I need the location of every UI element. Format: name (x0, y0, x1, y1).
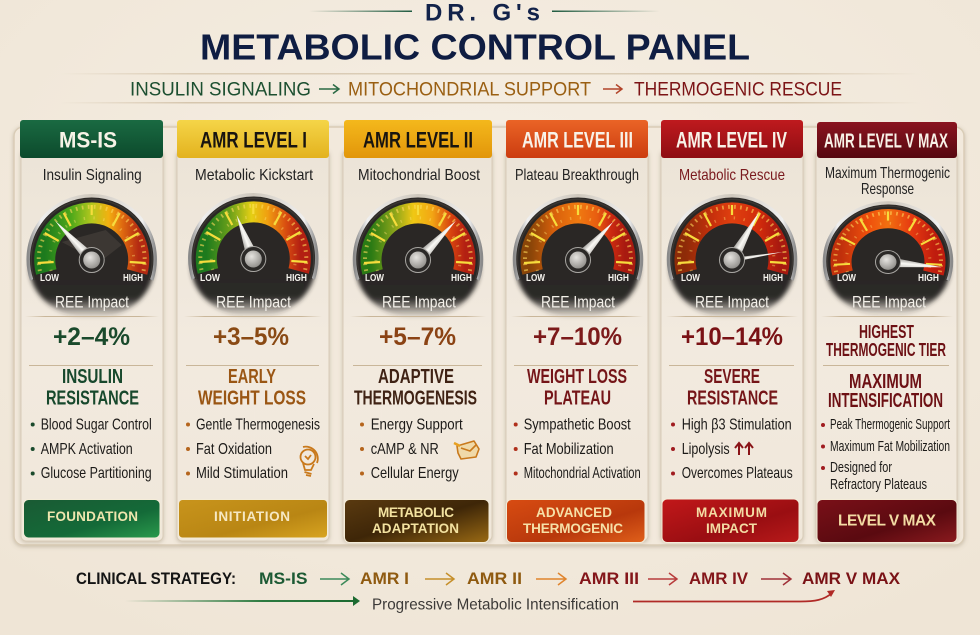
panel: MS-IS (20, 120, 163, 541)
badge: level v max (817, 500, 957, 542)
tier label (826, 322, 946, 360)
badge: metabolic adaptation (344, 500, 489, 542)
panel: AMR Level IV (661, 120, 803, 542)
value: +10–14% (681, 323, 783, 351)
badge: maximum impact (662, 499, 799, 542)
clinical strategy row: AMR II (467, 569, 522, 588)
divider (29, 365, 153, 366)
caption: Progressive Metabolic Intensification (372, 596, 619, 614)
divider (353, 365, 482, 366)
subtitle strip: INSULIN SIGNALING (130, 78, 311, 100)
gauge: REE Impact (541, 292, 615, 312)
bullet list: Designed for (830, 460, 892, 476)
header: AMR Level II: AMR LEVEL II (363, 128, 473, 152)
badge: metabolic adaptation: METABOLIC (378, 505, 454, 520)
heading: THERMOGENESIS (354, 388, 477, 410)
header: MS-IS: MS-IS (59, 128, 117, 152)
gauge: HIGH (451, 272, 472, 284)
bullet list: Mild Stimulation (196, 465, 288, 482)
clinical strategy row (76, 569, 901, 588)
subtitle strip: MITOCHONDRIAL SUPPORT (348, 78, 591, 100)
badge: metabolic adaptation: ADAPTATION (372, 521, 459, 536)
gauge (668, 196, 796, 318)
bullet list: Overcomes Plateaus (682, 465, 793, 482)
header: AMR Level III: AMR LEVEL III (522, 128, 633, 152)
divider (666, 316, 798, 317)
heading (354, 366, 477, 410)
badge: foundation (24, 500, 160, 538)
clinical strategy row: AMR III (579, 569, 639, 588)
panel: AMR Level III (506, 120, 648, 542)
gauge (824, 203, 952, 315)
gauge: REE Impact (55, 292, 129, 312)
header: AMR Level IV: AMR LEVEL IV (676, 128, 787, 152)
heading: PLATEAU (544, 388, 611, 410)
main panel frame (14, 127, 964, 545)
divider (184, 316, 322, 317)
gauge: LOW (40, 272, 59, 284)
clinical strategy row: AMR IV (689, 569, 749, 588)
bullet list: Glucose Partitioning (41, 465, 152, 482)
badge: maximum impact: IMPACT (706, 521, 758, 536)
bullet list: Refractory Plateaus (830, 477, 927, 493)
divider (186, 365, 319, 366)
badge: advanced thermogenic: THERMOGENIC (523, 521, 623, 536)
bullet list: Lipolysis (682, 441, 730, 458)
divider (823, 365, 949, 366)
header: AMR Level V Max (817, 122, 957, 158)
title block (200, 0, 750, 68)
bullet list: Gentle Thermogenesis (196, 416, 320, 434)
heading: EARLY (228, 366, 276, 388)
bullet list: Cellular Energy (371, 465, 459, 482)
bullet list (360, 416, 463, 482)
subtitle: Response (861, 181, 914, 198)
bullet list (671, 416, 793, 482)
gauge (28, 196, 155, 318)
gauge (514, 196, 642, 318)
panel: AMR Level V Max (816, 122, 957, 542)
subtitle strip: THERMOGENIC RESCUE (634, 78, 842, 100)
gauge: LOW (200, 272, 220, 284)
arrow (425, 573, 454, 585)
heading: INSULIN (62, 366, 123, 388)
bullet list (186, 416, 320, 482)
clinical strategy row: AMR V MAX (802, 569, 901, 588)
bullet list: Blood Sugar Control (41, 416, 152, 434)
clinical strategy row: AMR I (360, 569, 409, 588)
heading: WEIGHT LOSS (527, 366, 627, 388)
arrow (320, 573, 349, 585)
gauge: REE Impact (216, 292, 291, 312)
heading: WEIGHT LOSS (198, 388, 306, 410)
value: +7–10% (533, 323, 622, 351)
bullet list (821, 417, 950, 493)
gauge: REE Impact (852, 292, 926, 312)
arrow (648, 573, 677, 585)
gauge: HIGH (608, 272, 629, 284)
divider (350, 316, 486, 317)
title block: DR. G's (425, 0, 540, 26)
subtitle: Plateau Breakthrough (515, 167, 639, 184)
subtitle strip (60, 73, 920, 104)
bullet list: Fat Mobilization (524, 441, 614, 458)
divider (514, 365, 638, 366)
bullet list: High β3 Stimulation (682, 416, 792, 434)
arrow: green progression (125, 596, 360, 606)
heading: ADAPTIVE (378, 366, 454, 388)
heading: RESISTANCE (687, 388, 778, 410)
heading: RESISTANCE (46, 388, 139, 410)
value: +3–5% (213, 323, 289, 351)
heading (687, 366, 778, 410)
subtitle: Insulin Signaling (43, 167, 142, 184)
header: AMR Level I (177, 120, 329, 158)
title block: METABOLIC CONTROL PANEL (200, 26, 750, 68)
header: AMR Level I: AMR LEVEL I (200, 128, 307, 152)
badge: initiation (178, 500, 328, 538)
bullet list: AMPK Activation (41, 441, 133, 458)
heading (46, 366, 139, 410)
bullet list: Sympathetic Boost (524, 416, 631, 434)
subtitle: Metabolic Rescue (679, 167, 785, 184)
header: AMR Level II (344, 120, 492, 158)
bullet list: Energy Support (371, 416, 463, 434)
subtitle: Metabolic Kickstart (195, 167, 313, 184)
bullet list: Fat Oxidation (196, 441, 272, 458)
clinical strategy row: CLINICAL STRATEGY: (76, 569, 236, 588)
badge: level v max: LEVEL V MAX (838, 512, 937, 530)
heading: MAXIMUM (849, 371, 922, 393)
divider (669, 365, 794, 366)
arrow (761, 573, 791, 585)
tier label: HIGHEST (859, 322, 914, 342)
progression arrows and caption (125, 590, 835, 614)
gauge: HIGH (918, 272, 939, 284)
bullet list (31, 416, 152, 482)
arrow (536, 573, 566, 585)
heading: SEVERE (704, 366, 760, 388)
badge: initiation: INITIATION (214, 509, 290, 524)
heading (198, 366, 306, 410)
arrow: red progression (633, 590, 835, 602)
icon: light bulb (300, 447, 318, 476)
gauge: LOW (837, 272, 856, 284)
header: MS-IS (20, 120, 163, 158)
divider (25, 316, 159, 317)
gauge: HIGH (286, 272, 307, 284)
gauge: REE Impact (695, 292, 769, 312)
badge: maximum impact: MAXIMUM (696, 505, 767, 520)
subtitle (825, 165, 950, 198)
heading (828, 371, 943, 412)
bullet list: Mitochondrial Activation (524, 465, 641, 482)
badge: advanced thermogenic: ADVANCED (536, 505, 612, 520)
value: +2–4% (53, 323, 130, 351)
gauge: REE Impact (382, 292, 456, 312)
bullet list: cAMP & NR (371, 441, 439, 458)
icon: scroll badge (454, 441, 479, 459)
gauge: LOW (526, 272, 545, 284)
header: AMR Level III (506, 120, 648, 158)
divider (821, 316, 953, 317)
heading (527, 366, 627, 410)
gauge (190, 195, 317, 317)
gauge: LOW (365, 272, 384, 284)
gauge: LOW (681, 272, 700, 284)
panel: AMR Level II (343, 120, 492, 542)
gauge: HIGH (123, 272, 143, 284)
value: +5–7% (379, 323, 456, 351)
panel: AMR Level I (177, 120, 329, 541)
gauge (354, 196, 482, 318)
gauge: HIGH (763, 272, 783, 284)
subtitle: Mitochondrial Boost (358, 167, 480, 184)
divider (511, 316, 643, 317)
badge: advanced thermogenic (506, 500, 645, 542)
header: AMR Level IV (661, 120, 803, 158)
clinical strategy row: MS-IS (259, 569, 308, 588)
badge: foundation: FOUNDATION (47, 509, 138, 524)
bullet list (514, 416, 641, 482)
